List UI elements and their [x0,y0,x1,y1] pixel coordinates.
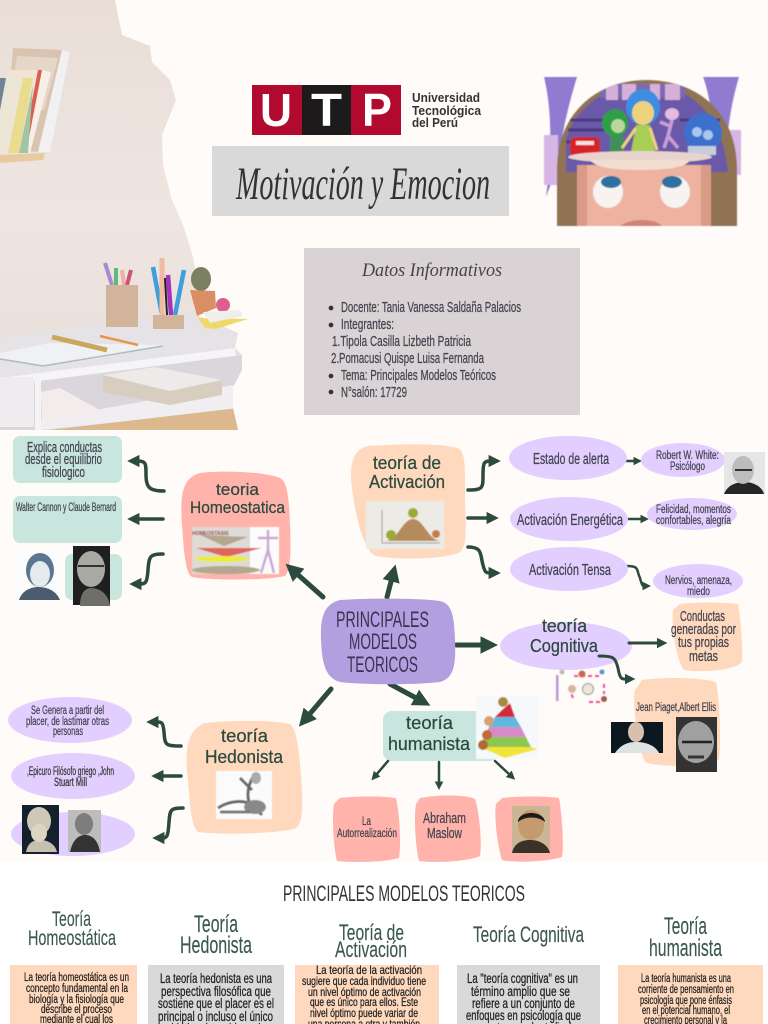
photo: desk with books and stationery [0,0,245,430]
node: Epicuro y John Stuart Mill: Stuart Mill [54,777,87,789]
node: teoria cognitiva: Cognitiva [530,636,599,656]
column: teoria de activacion: Activación [335,937,407,962]
image: Inside Out characters in head [544,77,741,226]
node: Epicuro y John Stuart Mill: ,Epicuro Filósofo griego ,John [27,766,114,778]
box: conductas generadas [671,602,742,671]
node: se genera a partir del placer [8,697,132,743]
column: teoria hedonista: perspectiva filosófica que [161,984,271,999]
image: homeostasis diagram: HOMEOSTASIS [192,531,229,537]
node: se genera a partir del placer: placer, de lastimar otras [26,716,109,728]
column: teoria hedonista [148,911,284,1024]
node: teoria humanista [383,711,498,761]
column: teoria cognitiva: término amplio que se [471,984,570,999]
node: Robert W. White [641,443,725,477]
logo: UTP: Universidad [412,91,480,105]
logo: UTP: Tecnológica [412,104,482,118]
box: conductas generadas: Conductas [680,609,725,625]
arrows: activacion branches [468,461,644,586]
node: se genera a partir del placer: Se Genera a partir del [31,705,104,717]
column: teoria cognitiva [457,922,600,1024]
node: felicidad [647,498,737,530]
box: Abraham Maslow [415,796,481,862]
column: teoria homeostatica: Homeostática [28,927,116,950]
column: teoria homeostatica: concepto fundamental en la [26,983,128,995]
arrows: central hub [296,573,484,716]
node: teoria cognitiva: teoría [542,616,588,636]
box: conductas generadas: generadas por [671,622,736,638]
icon: cactus, pot and open yellow book [190,267,248,329]
panel: teoria homeostatica: Homeostatica [190,498,285,517]
heading: principales modelos teoricos: PRINCIPALES MODELOS TEORICOS [283,881,525,906]
column: teoria hedonista: Hedonista [180,932,252,959]
panel: datos informativos: N°salón: 17729 [341,384,407,401]
photo: Robert W. White [724,452,765,494]
panel: datos informativos: Datos Informativos [361,260,502,281]
column: teoria humanista [618,913,763,1024]
node: nervios: Nervios, amenaza, [665,575,732,587]
column: teoria hedonista: sostiene que el placer es el [158,996,274,1011]
box: explica conductas: desde el equilibrio [25,452,102,468]
node: felicidad: confortables, alegría [656,515,731,527]
node: teoria humanista: teoría [406,713,454,733]
node: activacion tensa [510,547,628,591]
panel: datos informativos: Tema: Principales Modelos Teóricos [341,367,496,384]
column: teoria humanista: humanista [649,935,722,962]
panel: datos informativos: Docente: Tania Vanessa Saldaña Palacios [341,299,521,316]
node: se genera a partir del placer: personas [53,726,83,738]
arrows: cognitiva branches [599,643,659,679]
central node: principales modelos teoricos: MODELOS [349,629,417,654]
column: teoria cognitiva: La "teoría cognitiva" es un [467,971,578,986]
column: teoria hedonista: principal o incluso el único [158,1009,273,1024]
photo: Jean Piaget [611,722,663,753]
box: Abraham Maslow: Maslow [427,825,462,842]
central node: principales modelos teoricos [321,599,455,684]
column: teoria cognitiva: Teoría Cognitiva [473,922,585,947]
column: teoria humanista: Teoría [664,913,707,940]
column: teoria cognitiva: enfoques en psicología que [466,1008,581,1023]
box: Jean Piaget, Albert Ellis [634,678,720,766]
arrows: humanista branches [376,761,510,783]
column: teoria de activacion: un nivel óptimo de activación [308,985,421,999]
panel: datos informativos: 2.Pomacusi Quispe Luisa Fernanda [331,350,484,367]
node: Epicuro y John Stuart Mill [11,753,135,799]
box: Maslow portrait [495,796,563,862]
logo: UTP [252,84,482,136]
node: teoria humanista: humanista [388,734,471,754]
column: teoria de activacion: nivel óptimo puede variar de [310,1006,418,1020]
title [212,146,509,216]
box: la autorrealizacion: Autorrealización [337,828,397,840]
node: felicidad: Felicidad, momentos [656,504,731,516]
panel: teoria hedonista: teoría [221,726,269,746]
central node: principales modelos teoricos: TEORICOS [347,652,418,677]
column: teoria de activacion [295,920,439,1024]
arrows: hedonista branches [156,722,183,838]
node: activacion energetica: Activación Energética [517,512,623,529]
logo: UTP: del Perú [412,116,458,130]
box: explica conductas: fisiologico [42,465,85,481]
panel: teoria de activacion: teoría de [373,453,441,473]
node: Robert W. White: Robert W. White: [656,450,719,462]
node: activacion energetica [510,497,628,541]
column: teoria de activacion: La teoría de la activación [316,963,422,977]
box: conductas generadas: tus propias [678,635,729,651]
node: nervios [653,564,743,598]
title: Motivación y Emocion [235,158,490,210]
panel: teoria homeostatica: teoria [216,480,260,499]
photo: Albert Ellis [676,717,717,772]
box: la autorrealizacion [333,796,400,862]
node: activacion tensa: Activación Tensa [529,562,611,579]
node: nervios: miedo [687,586,710,598]
logo: UTP: P [362,84,392,136]
box: Walter Cannon y Claude Bernard [13,496,122,543]
column: teoria de activacion: sugiere que cada individuo tiene [302,974,426,988]
logo: UTP: U [260,84,292,136]
panel: teoria de activacion: Activación [369,472,445,492]
box: Walter Cannon y Claude Bernard: Walter Cannon y Claude Bernard [16,502,116,514]
arrows: homeostatica branches [137,461,164,584]
panel: teoria hedonista: Hedonista [205,747,284,767]
image: cognitive cycle diagram [556,670,607,702]
node: portraits Epicuro and Mill [11,805,135,856]
column: teoria hedonista: Teoría [194,911,238,938]
column: teoria homeostatica: La teoría homeostática es un [24,972,129,984]
node: estado de alerta: Estado de alerta [533,451,609,468]
column: teoria homeostatica: Teoría [52,908,91,931]
box: explica conductas [13,436,122,483]
panel: datos informativos: 1.Tipola Casilla Lizbeth Patricia [332,333,471,350]
column: teoria de activacion: que es único para ellos. Este [310,995,418,1009]
column: teoria cognitiva: refiere a un conjunto de [472,996,575,1011]
panel: datos informativos: Integrantes: [341,316,394,333]
central node: principales modelos teoricos: PRINCIPALES [336,607,429,632]
panel: teoria de activacion [351,444,466,559]
node: Robert W. White: Psicólogo [670,461,705,473]
column: teoria homeostatica: biología y la fisiología que [29,994,124,1006]
column: teoria hedonista: La teoría hedonista es una [160,971,272,986]
logo: UTP: T [311,84,342,136]
box: conductas generadas: metas [689,649,718,665]
box: Abraham Maslow: Abraham [423,810,466,827]
node: estado de alerta [509,436,627,480]
node: teoria cognitiva [500,616,632,670]
panel: teoria hedonista [187,721,302,834]
column: teoria homeostatica: describe el proceso [41,1004,112,1016]
column: teoria homeostatica [10,908,137,1024]
image: reclining figure with cup [216,771,272,819]
box: Jean Piaget, Albert Ellis: Jean Piaget,Albert Ellis [636,702,716,714]
image: arousal curve [366,501,444,549]
box: explica conductas: Explica conductas [27,440,102,456]
column: teoria de activacion: Teoría de [339,920,404,945]
image: Maslow pyramid [476,695,539,759]
box: la autorrealizacion: La [362,816,371,828]
box: portraits of Bernard and Cannon [14,546,122,606]
panel: teoria homeostatica [181,472,290,580]
panel: datos informativos [304,248,580,415]
